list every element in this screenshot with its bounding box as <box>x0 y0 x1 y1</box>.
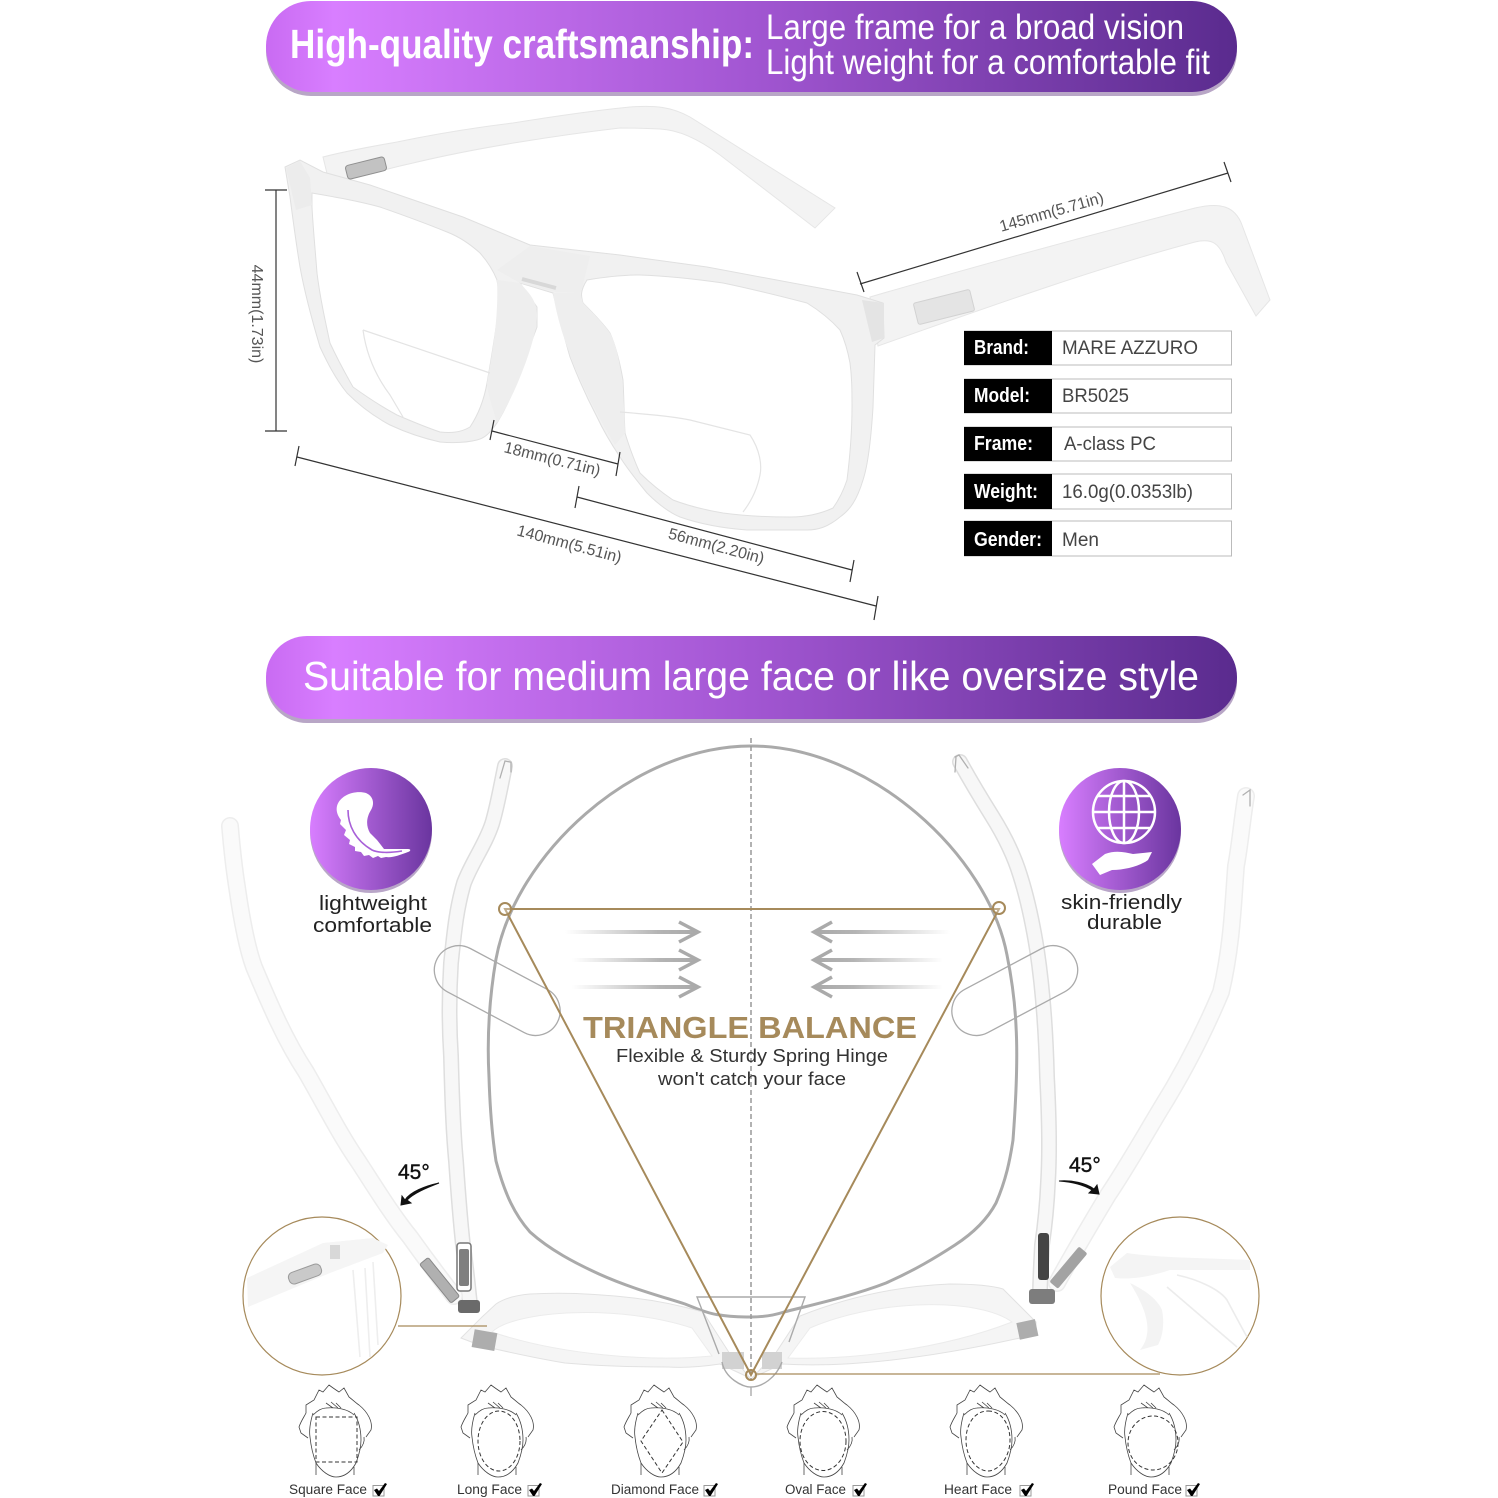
label: 45 degrees left <box>398 1161 439 1205</box>
nose bridge outline <box>697 1297 805 1396</box>
head outline <box>488 746 1017 1317</box>
glasses: front three-quarter view <box>285 106 1270 530</box>
row: weight: Weight: <box>974 481 1038 503</box>
label: 45 degrees left: 45° <box>398 1161 430 1184</box>
face type: long: Long Face <box>457 1482 522 1497</box>
dimension: temple length: 145mm(5.71in) <box>998 190 1106 236</box>
row: gender: Men <box>1062 530 1099 551</box>
face type: diamond: Diamond Face <box>611 1482 699 1497</box>
label: 45 degrees right <box>1059 1154 1101 1194</box>
text: spring hinge description <box>616 1046 888 1089</box>
row: model: Model: <box>974 385 1030 407</box>
banner: high-quality craftsmanship: Light weight for a comfortable fit <box>766 43 1210 82</box>
text: spring hinge description: won't catch your face <box>657 1069 846 1089</box>
text: skin-friendly durable: durable <box>1087 912 1162 934</box>
temple grip capsule: right <box>943 937 1086 1044</box>
arrows: pressure from left <box>565 922 698 997</box>
temple arms: open and flexed <box>230 755 1250 1304</box>
row: model <box>964 379 1232 413</box>
banner: suitable for medium large face <box>266 636 1237 723</box>
face type: long <box>457 1385 542 1497</box>
row: gender: Gender: <box>974 529 1042 551</box>
row: frame <box>964 427 1232 461</box>
banner: suitable for medium large face: Suitable for medium large face or like oversize style <box>303 653 1199 699</box>
banner: high-quality craftsmanship <box>266 1 1237 96</box>
glasses: front frame seen from above <box>420 1233 1087 1378</box>
dimension: lens width: 56mm(2.20in) <box>666 526 766 568</box>
row: brand: Brand: <box>974 337 1029 359</box>
face type: oval: Oval Face <box>785 1482 846 1497</box>
dimension: frame width <box>295 446 878 620</box>
text: lightweight comfortable: lightweight <box>319 893 427 915</box>
triangle balance lines <box>398 902 1160 1380</box>
face type: oval <box>785 1385 867 1497</box>
text: spring hinge description: Flexible & Sturdy Spring Hinge <box>616 1046 888 1066</box>
label: 45 degrees right: 45° <box>1069 1154 1101 1177</box>
row: weight: 16.0g(0.0353lb) <box>1062 482 1193 503</box>
face type: square <box>289 1385 387 1497</box>
face type: heart: Heart Face <box>944 1482 1012 1497</box>
detail circle: nose pad <box>1101 1217 1259 1375</box>
spec table <box>964 331 1232 556</box>
dimension: bridge width: 18mm(0.71in) <box>502 439 602 480</box>
text: skin-friendly durable <box>1061 892 1182 934</box>
spring coil <box>345 156 387 180</box>
dimension: lens height <box>248 190 287 431</box>
face type: diamond <box>611 1385 718 1497</box>
face type: square: Square Face <box>289 1482 367 1497</box>
heading: triangle balance: TRIANGLE BALANCE <box>583 1010 917 1045</box>
nose pad and bridge shading <box>487 280 537 423</box>
bifocal lines <box>363 330 761 512</box>
near hinge plate <box>913 289 975 325</box>
hinge blocks <box>472 1329 497 1351</box>
face type: heart <box>944 1385 1034 1497</box>
arrows: pressure from right <box>814 922 950 997</box>
row: frame: A-class PC <box>1064 434 1156 455</box>
row: frame: Frame: <box>974 433 1033 455</box>
text: lightweight comfortable <box>313 893 432 937</box>
dimension: lens height: 44mm(1.73in) <box>248 265 265 363</box>
temple grip capsule: left <box>426 937 569 1044</box>
row: brand <box>964 331 1232 365</box>
row: model: BR5025 <box>1062 386 1129 407</box>
dimension: frame width: 140mm(5.51in) <box>515 523 623 567</box>
row: gender <box>964 521 1232 556</box>
text: skin-friendly durable: skin-friendly <box>1061 892 1182 914</box>
banner: high-quality craftsmanship: Large frame for a broad vision <box>766 8 1184 47</box>
icon: globe in hand badge <box>1059 768 1181 893</box>
dimension: lens width <box>575 486 854 582</box>
banner: high-quality craftsmanship: High-quality craftsmanship: <box>290 21 754 67</box>
row: weight <box>964 474 1232 509</box>
text: lightweight comfortable: comfortable <box>313 915 432 937</box>
dimension: temple length <box>857 162 1231 292</box>
detail circle: spring hinge <box>243 1217 401 1375</box>
face type: pound <box>1108 1385 1200 1497</box>
row: brand: MARE AZZURO <box>1062 338 1198 359</box>
icon: feather badge <box>310 768 432 893</box>
far temple <box>323 106 835 228</box>
centre dashed line <box>750 738 752 1380</box>
frame front <box>285 160 884 530</box>
near temple <box>870 205 1270 346</box>
face type: pound: Pound Face <box>1108 1482 1182 1497</box>
spring hinges <box>420 1233 1087 1313</box>
dimension: bridge width <box>490 420 620 480</box>
